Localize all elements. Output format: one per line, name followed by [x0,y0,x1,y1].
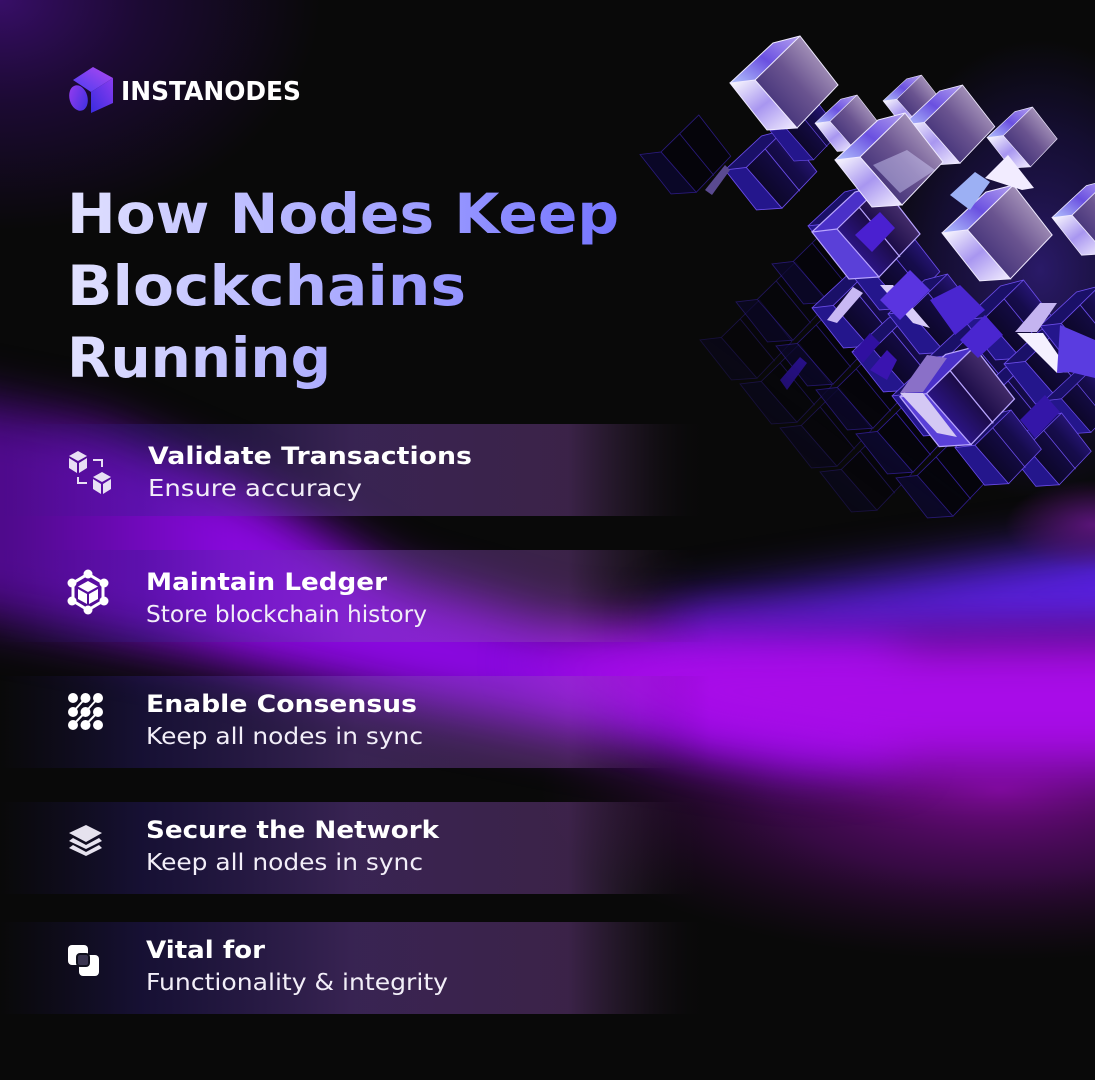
bright cubes [730,36,1095,281]
panel: enable consensus [0,676,710,768]
logo [66,67,301,113]
heading: Validate Transactions [148,442,472,470]
panel: vital for [0,922,710,1014]
faint far cubes [640,115,988,518]
crystal cube cluster [640,36,1095,518]
icon: cubes exchanging [69,451,111,494]
panel: maintain ledger [0,550,710,642]
title: How Nodes Keep [67,182,619,246]
logo cube mark [66,67,113,113]
description: Ensure accuracy [148,476,362,502]
description: Store blockchain history [146,602,427,628]
title [67,182,619,390]
panel: validate transactions [0,424,710,516]
icon: layers [69,825,102,856]
title: Blockchains [67,254,466,318]
icon: overlapping squares [68,945,99,976]
title: Running [67,326,331,390]
heading: Enable Consensus [146,690,417,718]
heading: Vital for [146,936,265,964]
description: Keep all nodes in sync [146,850,423,876]
dark mid cubes [725,100,1095,486]
heading: Secure the Network [146,816,440,844]
highlight strips [705,150,1095,438]
logo wordmark: INSTANODES [121,77,301,107]
description: Keep all nodes in sync [146,724,423,750]
icon: dot grid [68,693,103,730]
panel: secure the network [0,802,710,894]
icon: node hexagon cube [68,570,108,614]
heading: Maintain Ledger [146,568,387,596]
description: Functionality & integrity [146,970,448,996]
